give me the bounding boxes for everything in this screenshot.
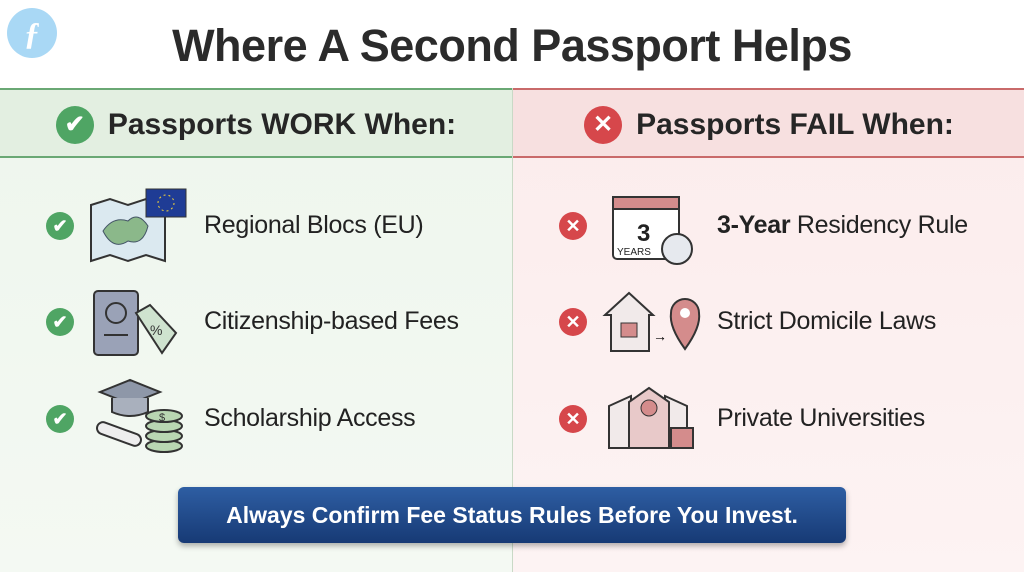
callout banner: Always Confirm Fee Status Rules Before You Invest. (226, 502, 798, 528)
item: fees (46, 290, 459, 356)
item: residency: 3 (637, 220, 650, 247)
heading: works: Passports WORK When: (108, 108, 456, 141)
item: fees: Citizenship-based Fees (204, 307, 459, 335)
heading: fails (513, 88, 1024, 158)
item: fees: ✔ (52, 312, 68, 332)
item: regional blocs: Regional Blocs (EU) (204, 211, 423, 239)
heading: fails: Passports FAIL When: (636, 108, 954, 141)
panel: works (0, 88, 512, 572)
logo: ƒ (24, 15, 40, 51)
item: domicile: ✕ (565, 312, 581, 332)
item: scholarship (46, 378, 415, 453)
title: Where A Second Passport Helps (172, 20, 852, 71)
item: regional blocs: ✔ (52, 216, 68, 236)
item: regional blocs (46, 188, 423, 262)
item: scholarship: Scholarship Access (204, 404, 415, 432)
item: domicile: Strict Domicile Laws (717, 307, 936, 335)
item: residency: 3-Year Residency Rule (717, 211, 968, 239)
item: scholarship: ✔ (52, 409, 68, 429)
item: private (559, 386, 925, 449)
panel: fails (512, 88, 1024, 572)
item: domicile: → (653, 328, 667, 344)
item: private: ✕ (565, 409, 581, 429)
item: residency: ✕ (565, 216, 581, 236)
logo (7, 8, 57, 58)
heading: fails: ✕ (593, 111, 613, 138)
item: residency (559, 196, 968, 265)
item: scholarship: $ (159, 412, 165, 424)
callout banner (178, 487, 846, 543)
heading: works: ✔ (65, 111, 85, 138)
heading: works (0, 88, 512, 158)
item: residency: YEARS (617, 247, 651, 258)
item: private: Private Universities (717, 404, 925, 432)
item: fees: % (150, 322, 162, 338)
item: domicile (559, 292, 936, 352)
